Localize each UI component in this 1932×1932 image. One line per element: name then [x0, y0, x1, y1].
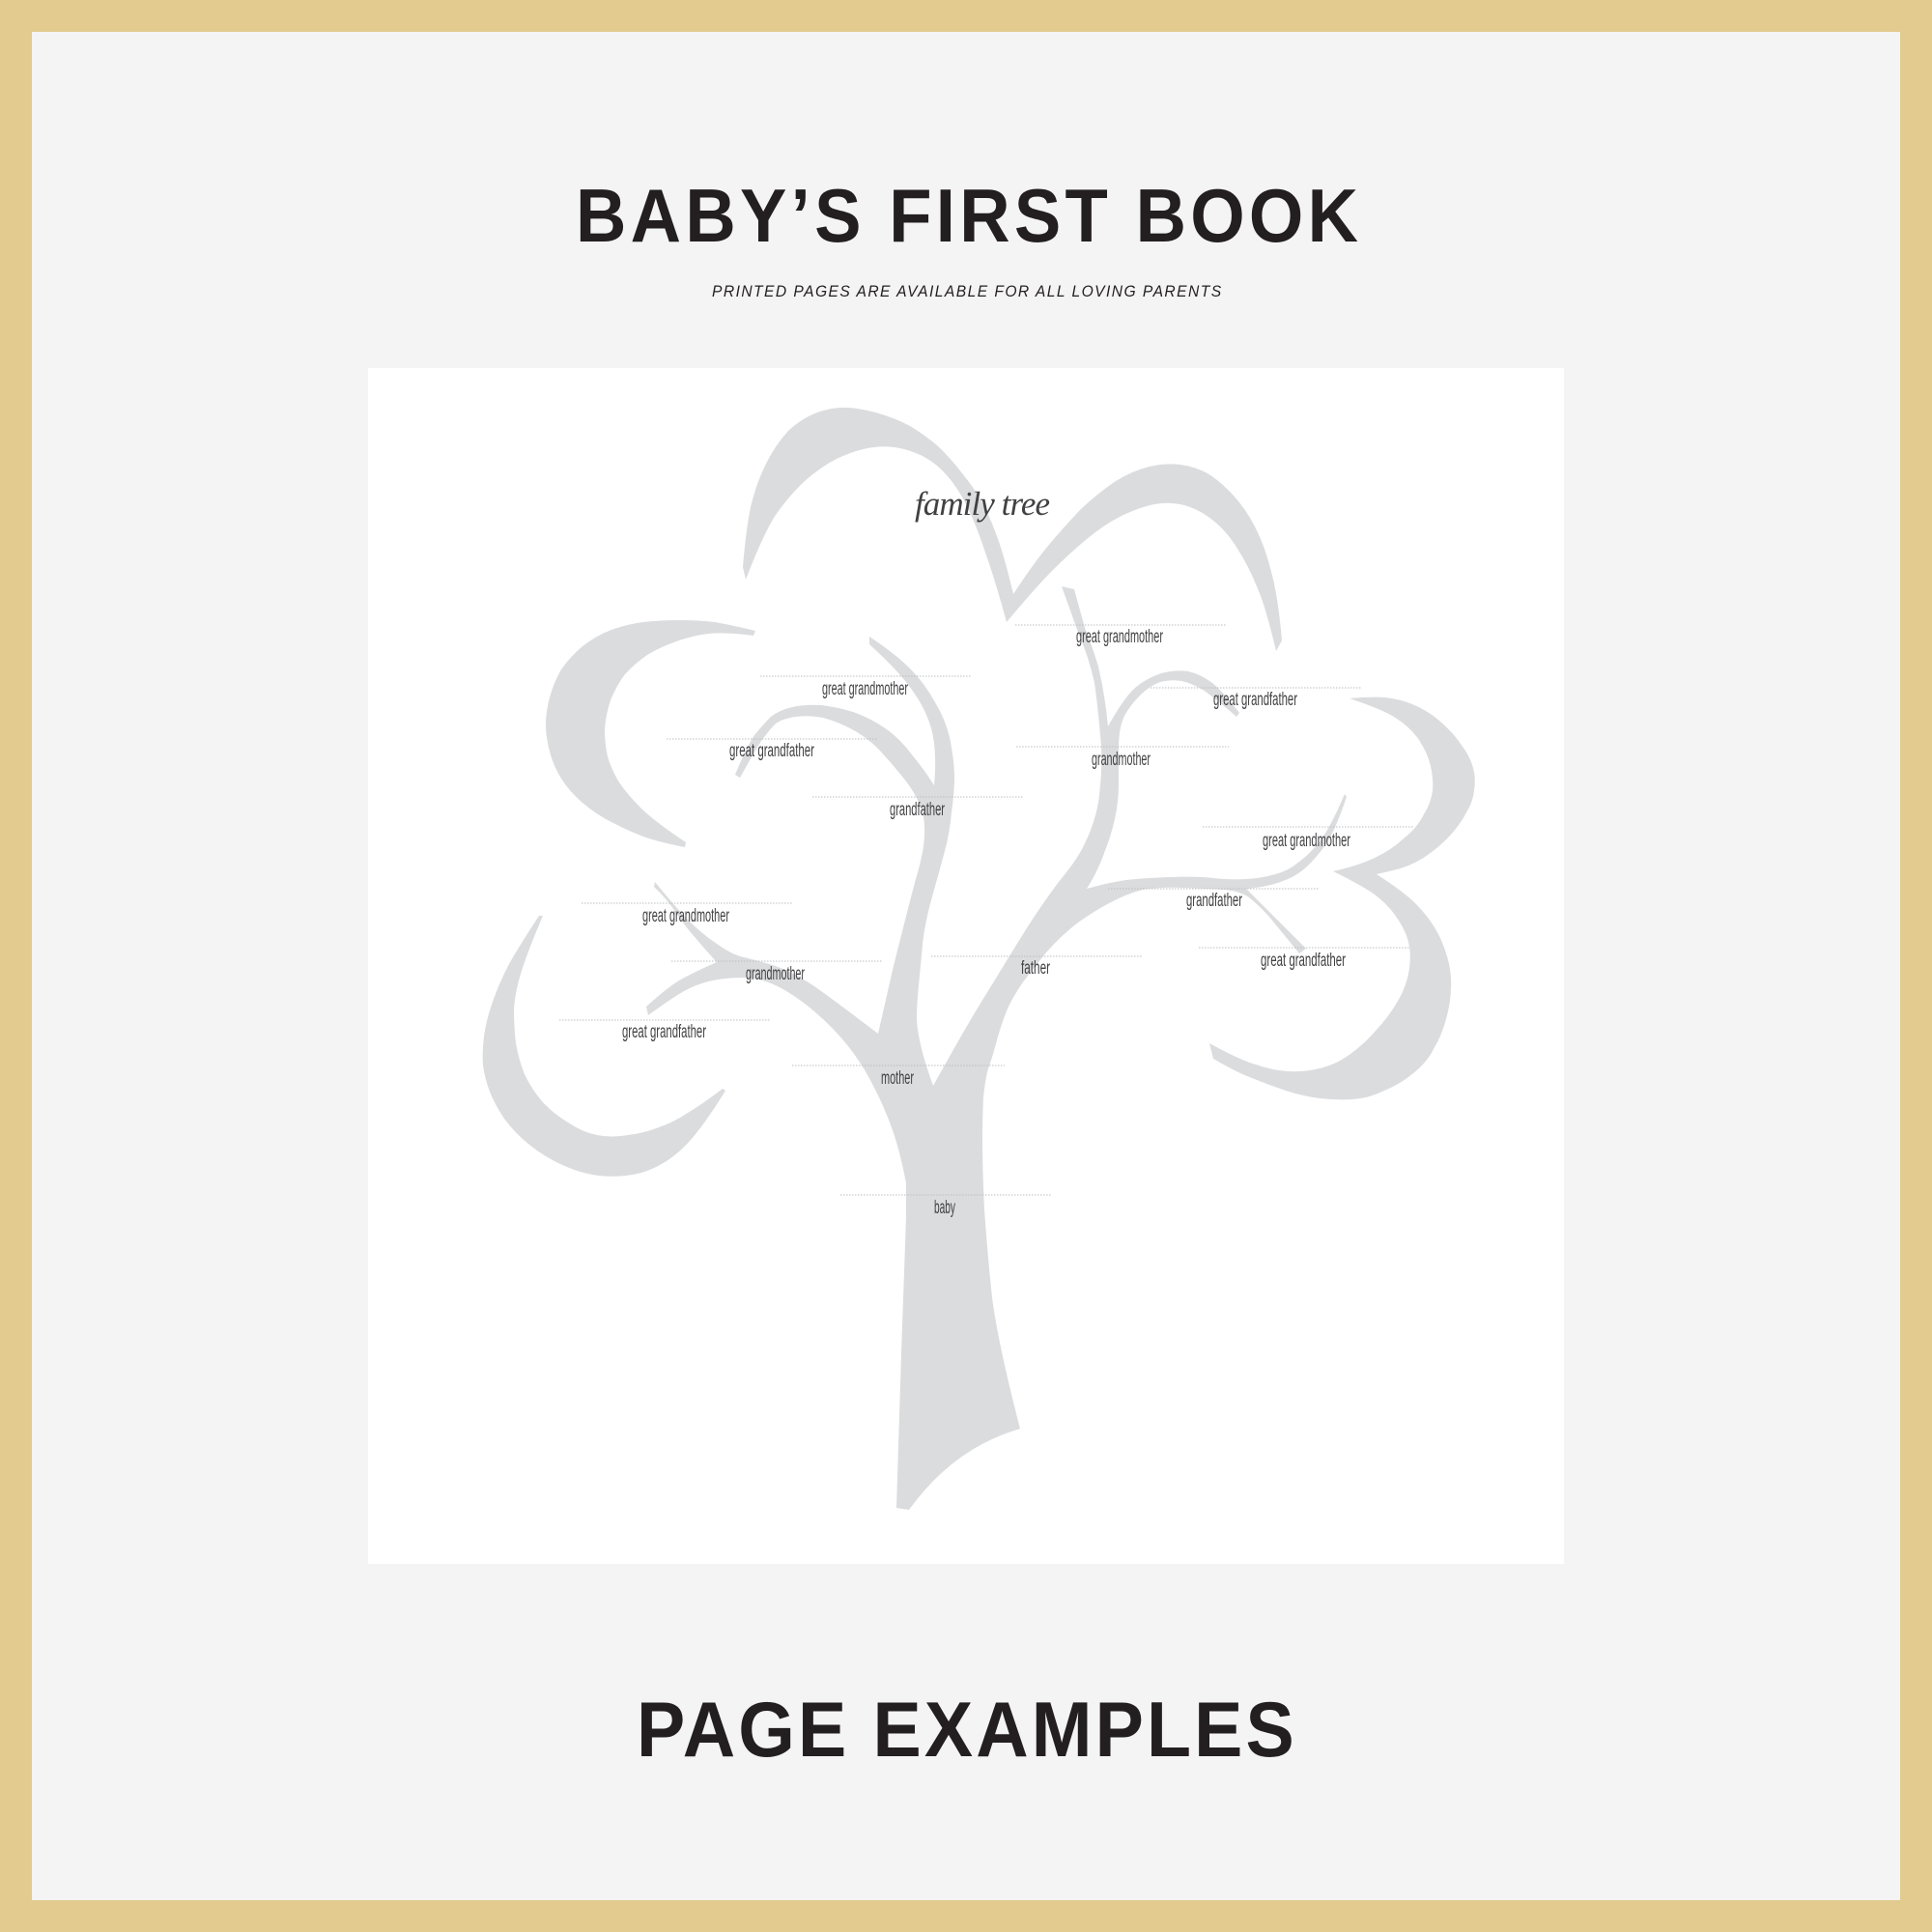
label: lower grandmother: grandmother: [746, 964, 805, 984]
label: baby: baby: [934, 1198, 955, 1218]
label: top great grandmother: great grandmother: [1076, 627, 1163, 647]
label: right great grandmother: great grandmother: [1263, 831, 1350, 851]
family tree illustration: [483, 408, 1475, 1510]
subtitle: PRINTED PAGES ARE AVAILABLE FOR ALL LOVING PARENTS: [712, 282, 1221, 300]
tree crown top arches: [743, 408, 1282, 651]
label: upper great grandfather: great grandfather: [1213, 690, 1297, 710]
label: left great grandmother: great grandmother: [822, 679, 908, 699]
label: upper grandmother: grandmother: [1092, 750, 1151, 770]
lower left crescent: [483, 916, 725, 1177]
label: lower great grandfather: great grandfather: [622, 1022, 706, 1042]
right crescents: [1209, 697, 1475, 1099]
label: father: father: [1021, 958, 1050, 979]
trunk and branches: [646, 586, 1347, 1510]
footer heading: PAGE EXAMPLES: [637, 1685, 1294, 1774]
label: left great grandfather: great grandfather: [729, 741, 814, 761]
panel: white page: [368, 368, 1564, 1564]
label: left grandfather: grandfather: [890, 800, 945, 820]
label: right grandfather: grandfather: [1186, 891, 1242, 911]
label: mother: mother: [881, 1068, 914, 1089]
label: right lower great grandfather: great grandfather: [1261, 951, 1346, 971]
upper left crescent: [546, 620, 755, 847]
heading: family tree: family tree: [915, 485, 1050, 523]
title: BABY’S FIRST BOOK: [576, 174, 1358, 258]
label: lower great grandmother: great grandmother: [642, 906, 729, 926]
